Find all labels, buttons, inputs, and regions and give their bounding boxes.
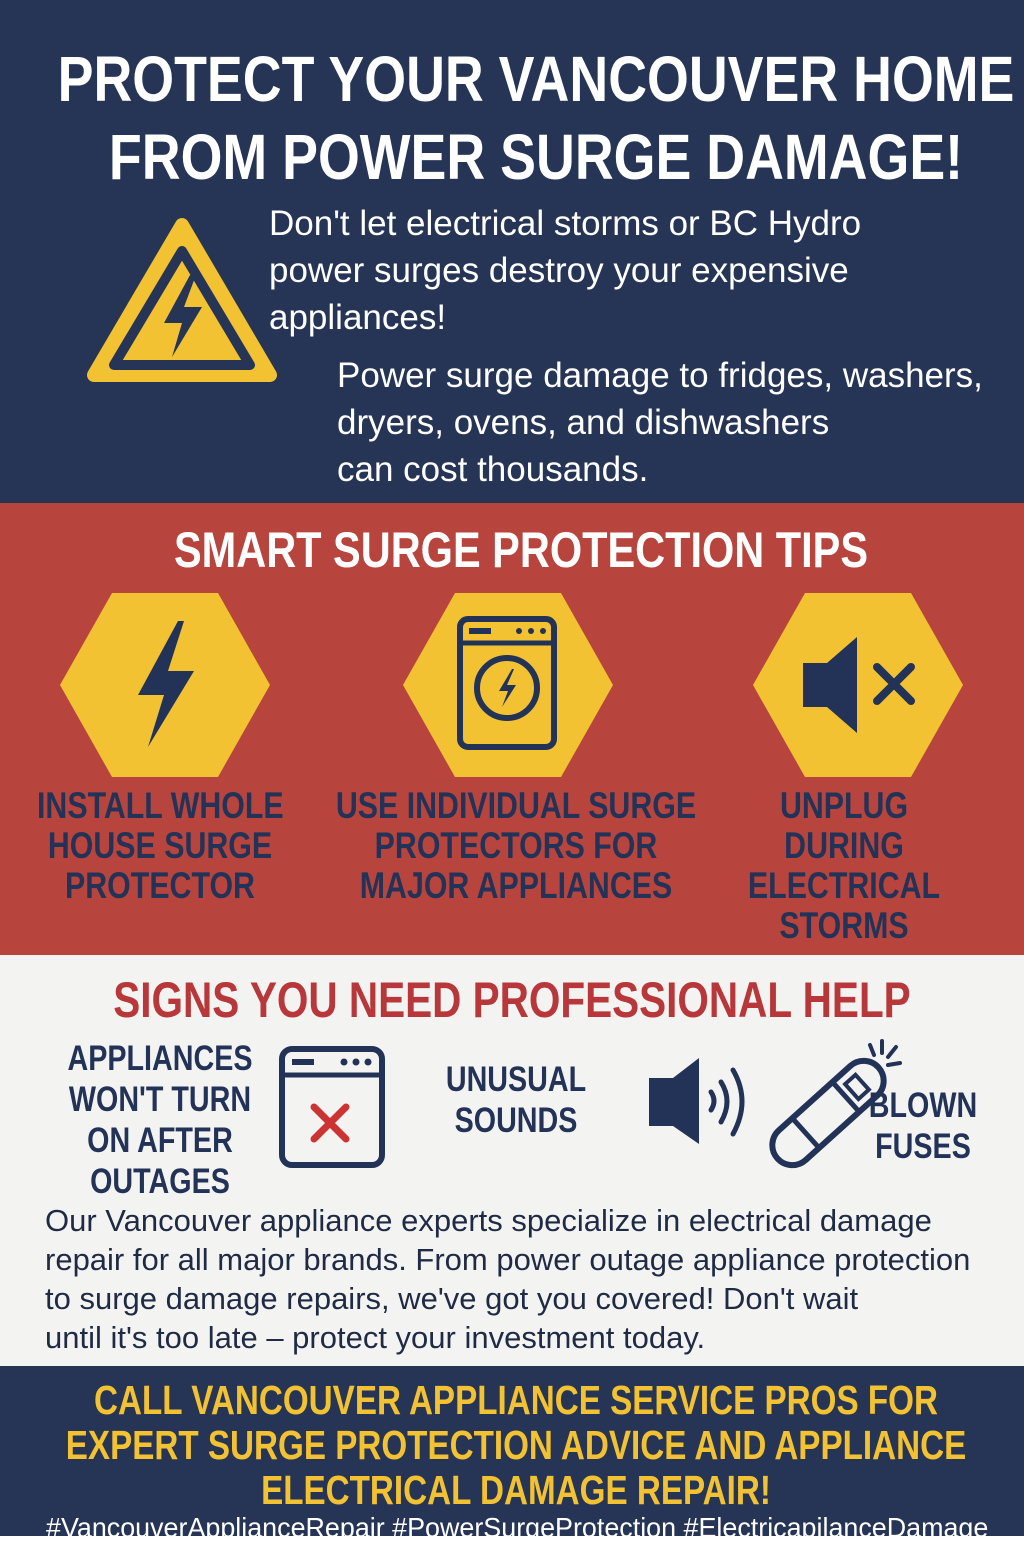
text: intro: Don't let electrical storms or BC Hydro: [269, 204, 861, 243]
text: call to action: [66, 1377, 966, 1513]
text: sign 3: FUSES: [875, 1127, 971, 1166]
text: services paragraph: Our Vancouver appliance experts specialize in electrical damage: [45, 1203, 932, 1238]
text: call to action: EXPERT SURGE PROTECTION ADVICE AND APPLIANCE: [66, 1422, 966, 1468]
text: call to action: CALL VANCOUVER APPLIANCE SERVICE PROS FOR: [94, 1377, 938, 1423]
text: tip 2: USE INDIVIDUAL SURGE: [336, 785, 696, 826]
title: [58, 43, 1014, 193]
text: intro: power surges destroy your expensive: [269, 251, 849, 290]
text: cost: Power surge damage to fridges, washers,: [337, 356, 983, 395]
heading: tips: SMART SURGE PROTECTION TIPS: [174, 522, 868, 578]
icon: lightning hexagon: [60, 593, 270, 777]
text: tip 3: ELECTRICAL: [748, 865, 940, 906]
text: sign 2: UNUSUAL: [446, 1060, 586, 1099]
text: services paragraph: until it's too late – protect your investment today.: [45, 1320, 705, 1355]
panel: signs: [0, 955, 1024, 1366]
text: hashtags: #VancouverApplianceRepair #PowerSurgeProtection #ElectricapilanceDamage: [46, 1512, 988, 1543]
text: cost: [337, 356, 983, 489]
text: sign 1: APPLIANCES: [68, 1039, 252, 1078]
text: cost: can cost thousands.: [337, 450, 648, 489]
icon: muted speaker hexagon: [753, 593, 963, 777]
text: tip 3: UNPLUG: [780, 785, 908, 826]
text: services paragraph: repair for all major brands. From power outage appliance protection: [45, 1242, 970, 1277]
text: sign 1: OUTAGES: [90, 1162, 230, 1201]
icon: blown fuse: [769, 1039, 902, 1168]
text: cost: dryers, ovens, and dishwashers: [337, 403, 829, 442]
text: sign 3: [869, 1086, 977, 1166]
text: sign 1: [68, 1039, 252, 1201]
text: sign 3: BLOWN: [869, 1086, 977, 1125]
text: tip 3: [748, 785, 940, 946]
icon: warning triangle: [87, 218, 277, 382]
text: sign 2: SOUNDS: [455, 1101, 577, 1140]
text: tip 3: STORMS: [779, 905, 909, 946]
icon: washer hexagon: [403, 593, 613, 777]
icon: speaker sound: [649, 1058, 744, 1144]
text: sign 1: WON'T TURN: [69, 1080, 251, 1119]
text: intro: [269, 204, 861, 337]
text: tip 1: [37, 785, 284, 906]
text: services paragraph: to surge damage repairs, we've got you covered! Don't wait: [45, 1281, 858, 1316]
title: PROTECT YOUR VANCOUVER HOME: [58, 43, 1014, 115]
text: tip 2: PROTECTORS FOR: [375, 825, 657, 866]
text: services paragraph: [45, 1203, 970, 1355]
panel: header: [0, 0, 1024, 503]
text: tip 1: INSTALL WHOLE: [37, 785, 284, 826]
text: intro: appliances!: [269, 298, 446, 337]
text: tip 2: [336, 785, 696, 906]
text: tip 1: PROTECTOR: [65, 865, 255, 906]
text: call to action: ELECTRICAL DAMAGE REPAIR!: [261, 1467, 771, 1513]
panel: call to action: [0, 1366, 1024, 1536]
text: tip 3: DURING: [784, 825, 904, 866]
text: tip 1: HOUSE SURGE: [48, 825, 272, 866]
text: sign 1: ON AFTER: [87, 1121, 233, 1160]
title: FROM POWER SURGE DAMAGE!: [109, 121, 963, 193]
icon: appliance with X: [279, 1046, 385, 1168]
text: tip 2: MAJOR APPLIANCES: [360, 865, 672, 906]
panel: tips: [0, 503, 1024, 955]
text: sign 2: [446, 1060, 586, 1140]
heading: signs: SIGNS YOU NEED PROFESSIONAL HELP: [113, 972, 911, 1028]
